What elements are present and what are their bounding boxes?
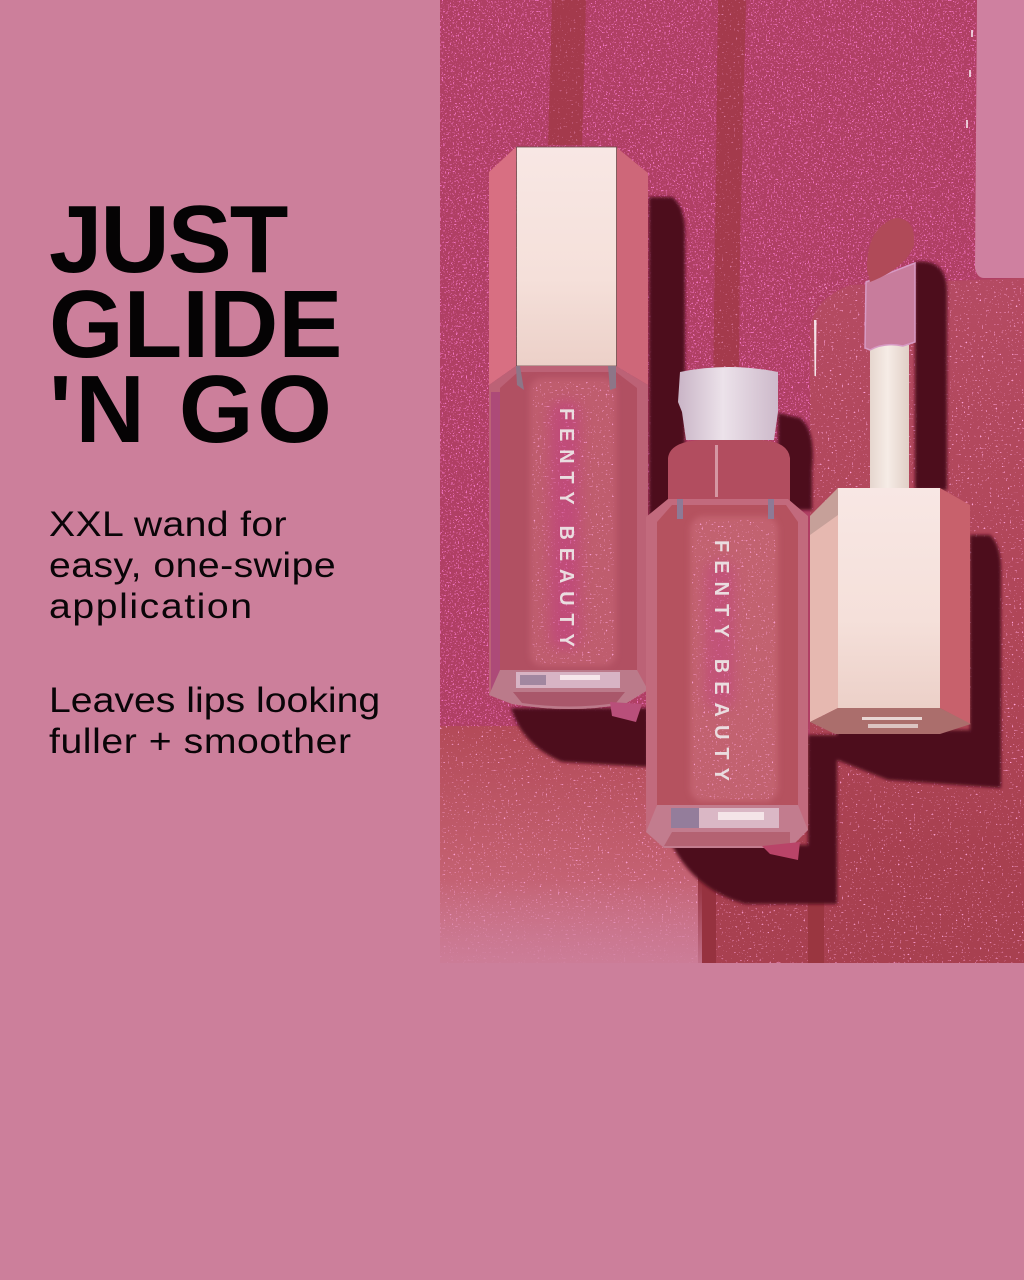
left tube top corners bbox=[516, 366, 616, 390]
background: gloss swatch bbox=[440, 0, 1024, 963]
title bbox=[49, 186, 342, 463]
brand text: left tube: FENTY BEAUTY bbox=[555, 408, 577, 655]
right tube inner bbox=[657, 505, 798, 805]
text block: wand: easy, one-swipe bbox=[49, 546, 336, 585]
right tube sparkle panel bbox=[690, 516, 778, 802]
wand cap sides bbox=[810, 488, 970, 724]
text block: wand: XXL wand for bbox=[49, 505, 287, 544]
product photo bbox=[440, 0, 1024, 963]
text block: wand bbox=[49, 505, 336, 626]
shadows bbox=[511, 197, 1001, 904]
gloss drips bbox=[548, 0, 824, 963]
collar bbox=[668, 440, 790, 505]
wand stick bbox=[870, 345, 909, 488]
left cap side panels bbox=[489, 147, 648, 385]
title: JUST bbox=[49, 186, 286, 293]
right tube top corners bbox=[677, 499, 774, 519]
right tube glass bbox=[646, 499, 808, 846]
title: 'N GO bbox=[49, 356, 336, 463]
left tube base bbox=[489, 670, 648, 722]
wand applicator bbox=[865, 263, 915, 350]
right tube base bbox=[646, 805, 808, 860]
left tube sparkle panel bbox=[530, 378, 616, 666]
left tube glass bbox=[489, 366, 648, 709]
wand cap face bbox=[838, 488, 940, 708]
text block: lips: fuller + smoother bbox=[49, 722, 352, 761]
title: GLIDE bbox=[49, 271, 342, 378]
wand cap bottom bbox=[810, 708, 971, 734]
wand and cap bbox=[810, 218, 971, 734]
left bottle bbox=[489, 147, 648, 722]
gloss drop bbox=[867, 218, 914, 282]
brand text: right tube: FENTY BEAUTY bbox=[710, 540, 732, 789]
text block: lips bbox=[49, 681, 380, 761]
right bottle bbox=[646, 367, 808, 860]
text block: lips: Leaves lips looking bbox=[49, 681, 380, 720]
clear neck bbox=[678, 367, 778, 440]
left tube inner bbox=[500, 372, 637, 670]
text block: wand: application bbox=[49, 587, 254, 626]
left cap face bbox=[516, 147, 616, 366]
